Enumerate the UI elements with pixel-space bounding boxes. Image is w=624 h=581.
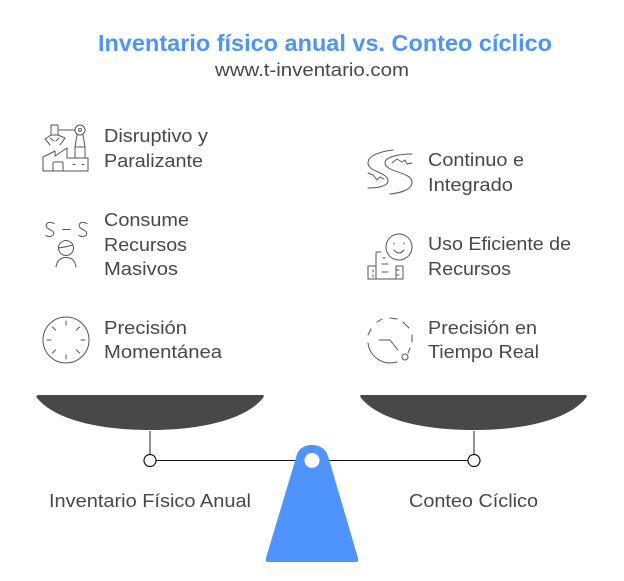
label: Conteo Cíclico: Conteo Cíclico	[409, 490, 538, 511]
text: Uso Eficiente de Recursos	[428, 233, 571, 279]
text: Uso Eficiente de Recursos: Recursos	[428, 258, 511, 279]
text: Precisión en Tiempo Real	[428, 317, 539, 362]
text: Continuo e Integrado	[428, 149, 524, 195]
left hanger	[149, 431, 151, 454]
right pivot	[468, 454, 480, 466]
text: Precisión en Tiempo Real: Tiempo Real	[428, 341, 539, 362]
text: Continuo e Integrado: Continuo e	[428, 149, 524, 170]
icon: money and person	[46, 222, 87, 267]
left pivot	[144, 454, 156, 466]
text: Consume Recursos Masivos: Masivos	[104, 258, 178, 279]
right hanger	[473, 431, 475, 454]
text: Precisión en Tiempo Real: Precisión en	[428, 317, 537, 338]
label: Inventario Físico Anual: Inventario Físico Anual	[49, 490, 251, 511]
text: Disruptivo y Paralizante: Paralizante	[104, 150, 203, 171]
text: Precisión Momentánea: Precisión	[104, 317, 187, 338]
text: Uso Eficiente de Recursos: Uso Eficiente de	[428, 233, 571, 254]
fulcrum	[266, 445, 358, 562]
text: Consume Recursos Masivos: Consume	[104, 209, 189, 230]
text: Continuo e Integrado: Integrado	[428, 174, 513, 195]
right pan	[360, 395, 587, 430]
text: Precisión Momentánea	[104, 317, 223, 362]
text: Precisión Momentánea: Momentánea	[104, 341, 223, 362]
icon: dashed clock with running hand	[368, 318, 412, 363]
title: Inventario físico anual vs. Conteo cíclico	[98, 30, 552, 56]
text: Disruptivo y Paralizante: Disruptivo y	[104, 125, 209, 146]
balance beam	[156, 460, 468, 462]
left pan	[36, 395, 264, 430]
icon: smiling face over buildings	[368, 234, 412, 279]
text: Consume Recursos Masivos	[104, 209, 189, 279]
icon: factory with robot arm	[43, 125, 88, 171]
text: Disruptivo y Paralizante	[104, 125, 209, 171]
text: Consume Recursos Masivos: Recursos	[104, 234, 187, 255]
icon: winding river	[368, 150, 412, 194]
icon: clock face	[43, 317, 89, 363]
subtitle: www.t-inventario.com	[214, 59, 409, 80]
